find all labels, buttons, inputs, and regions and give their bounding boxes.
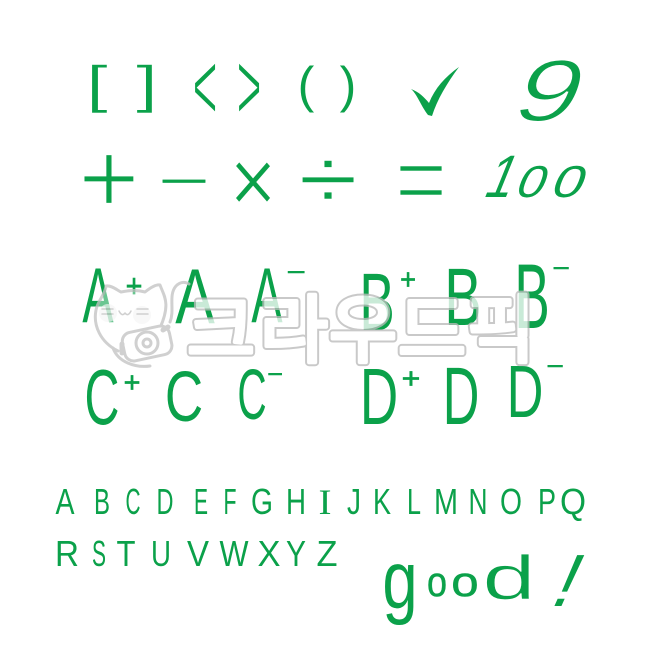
alphabet A to Q: M	[434, 481, 458, 522]
grade A plus	[82, 252, 142, 339]
grade A minus	[251, 252, 306, 339]
alphabet A to Q: F	[224, 481, 236, 522]
grade C minus	[237, 355, 283, 435]
alphabet A to Q: B	[94, 481, 110, 522]
alphabet A to Q: O	[500, 481, 522, 522]
grade C: C	[165, 357, 203, 437]
right parenthesis: )	[340, 57, 356, 113]
grade D: D	[443, 351, 479, 442]
grade D plus: D	[360, 353, 398, 442]
alphabet A to Q: A	[56, 481, 74, 522]
alphabet R to Z: X	[258, 533, 280, 574]
handwritten word good!: g	[382, 534, 418, 626]
grade A plus: A	[82, 252, 114, 339]
alphabet R to Z: T	[116, 533, 136, 574]
alphabet R to Z: V	[187, 533, 209, 574]
grade A minus: A	[251, 252, 283, 339]
score 100: 1	[476, 143, 530, 211]
grade D minus: −	[546, 352, 564, 379]
handwritten word good!: o	[427, 560, 447, 606]
alphabet R to Z: Y	[286, 533, 306, 574]
equals sign: =	[395, 125, 447, 233]
grade B minus: −	[552, 254, 570, 281]
grade B: B	[444, 250, 482, 342]
watermark: cat, camera and wordmark	[95, 271, 535, 378]
grade A minus: −	[286, 259, 306, 286]
grade B plus: +	[400, 263, 416, 295]
grade B plus: B	[359, 256, 395, 348]
wordmark inner: 크라우드픽	[187, 271, 535, 378]
grade D plus	[360, 353, 420, 442]
score 100: 0	[509, 157, 557, 207]
handwritten word good!: d	[482, 544, 536, 613]
alphabet A to Q: D	[156, 481, 174, 522]
grade C minus: −	[267, 361, 283, 388]
alphabet R to Z: R	[55, 533, 79, 574]
grade D minus	[507, 352, 564, 433]
symbols row: brackets, check and nine	[86, 33, 601, 142]
left angle bracket: <	[193, 33, 217, 142]
left square bracket: [	[86, 56, 108, 114]
icon: check mark	[411, 67, 459, 116]
icon: cat with camera	[95, 282, 189, 366]
alphabet A to Q: N	[468, 481, 488, 522]
alphabet A to Q: K	[373, 481, 391, 522]
score 100	[476, 143, 595, 211]
operators row: plus, minus, times, divide, equals, 100	[78, 122, 595, 236]
grade B minus	[514, 245, 570, 348]
alphabet R to Z: S	[92, 533, 106, 574]
alphabet R to Z: W	[220, 533, 249, 574]
grade C plus: C	[85, 353, 119, 441]
grade A: A	[175, 252, 215, 340]
times sign: ×	[229, 130, 277, 233]
alphabet R to Z: Z	[316, 533, 338, 574]
alphabet A to Q: H	[286, 481, 306, 522]
right angle bracket: >	[237, 33, 261, 142]
grade B minus: B	[514, 245, 550, 348]
score 100: 0	[544, 158, 595, 207]
alphabet R to Z: U	[151, 533, 171, 574]
alphabet A to Q: L	[407, 481, 421, 522]
handwritten word good!: !	[540, 540, 598, 622]
alphabet A to Q: P	[538, 481, 556, 522]
plus sign: +	[78, 122, 140, 236]
minus sign: −	[159, 160, 209, 203]
grade B plus	[359, 256, 416, 348]
grade C minus: C	[237, 355, 267, 435]
grade D plus: +	[402, 362, 420, 395]
alphabet A to Q	[56, 481, 586, 522]
grade D minus: D	[507, 352, 543, 433]
left parenthesis: (	[298, 57, 315, 113]
grade C plus: +	[124, 367, 140, 399]
handwritten word good!: o	[451, 559, 479, 605]
numeral nine: 9	[501, 43, 601, 140]
divide sign: ÷	[298, 130, 358, 228]
grade A plus: +	[126, 268, 142, 304]
alphabet A to Q: I	[318, 482, 332, 522]
grades row: C and D	[85, 351, 564, 442]
grade C plus	[85, 353, 140, 441]
handwritten word good!	[382, 534, 598, 626]
right square bracket: ]	[136, 56, 158, 114]
alphabet A to Q: J	[347, 481, 361, 522]
alphabet A to Q: Q	[560, 481, 586, 522]
alphabet A to Q: E	[194, 481, 208, 522]
grades row: A and B	[82, 245, 570, 348]
alphabet A to Q: C	[126, 481, 140, 522]
alphabet R to Z	[55, 533, 338, 574]
wordmark outline: 크라우드픽	[187, 271, 535, 378]
alphabet A to Q: G	[251, 481, 273, 522]
